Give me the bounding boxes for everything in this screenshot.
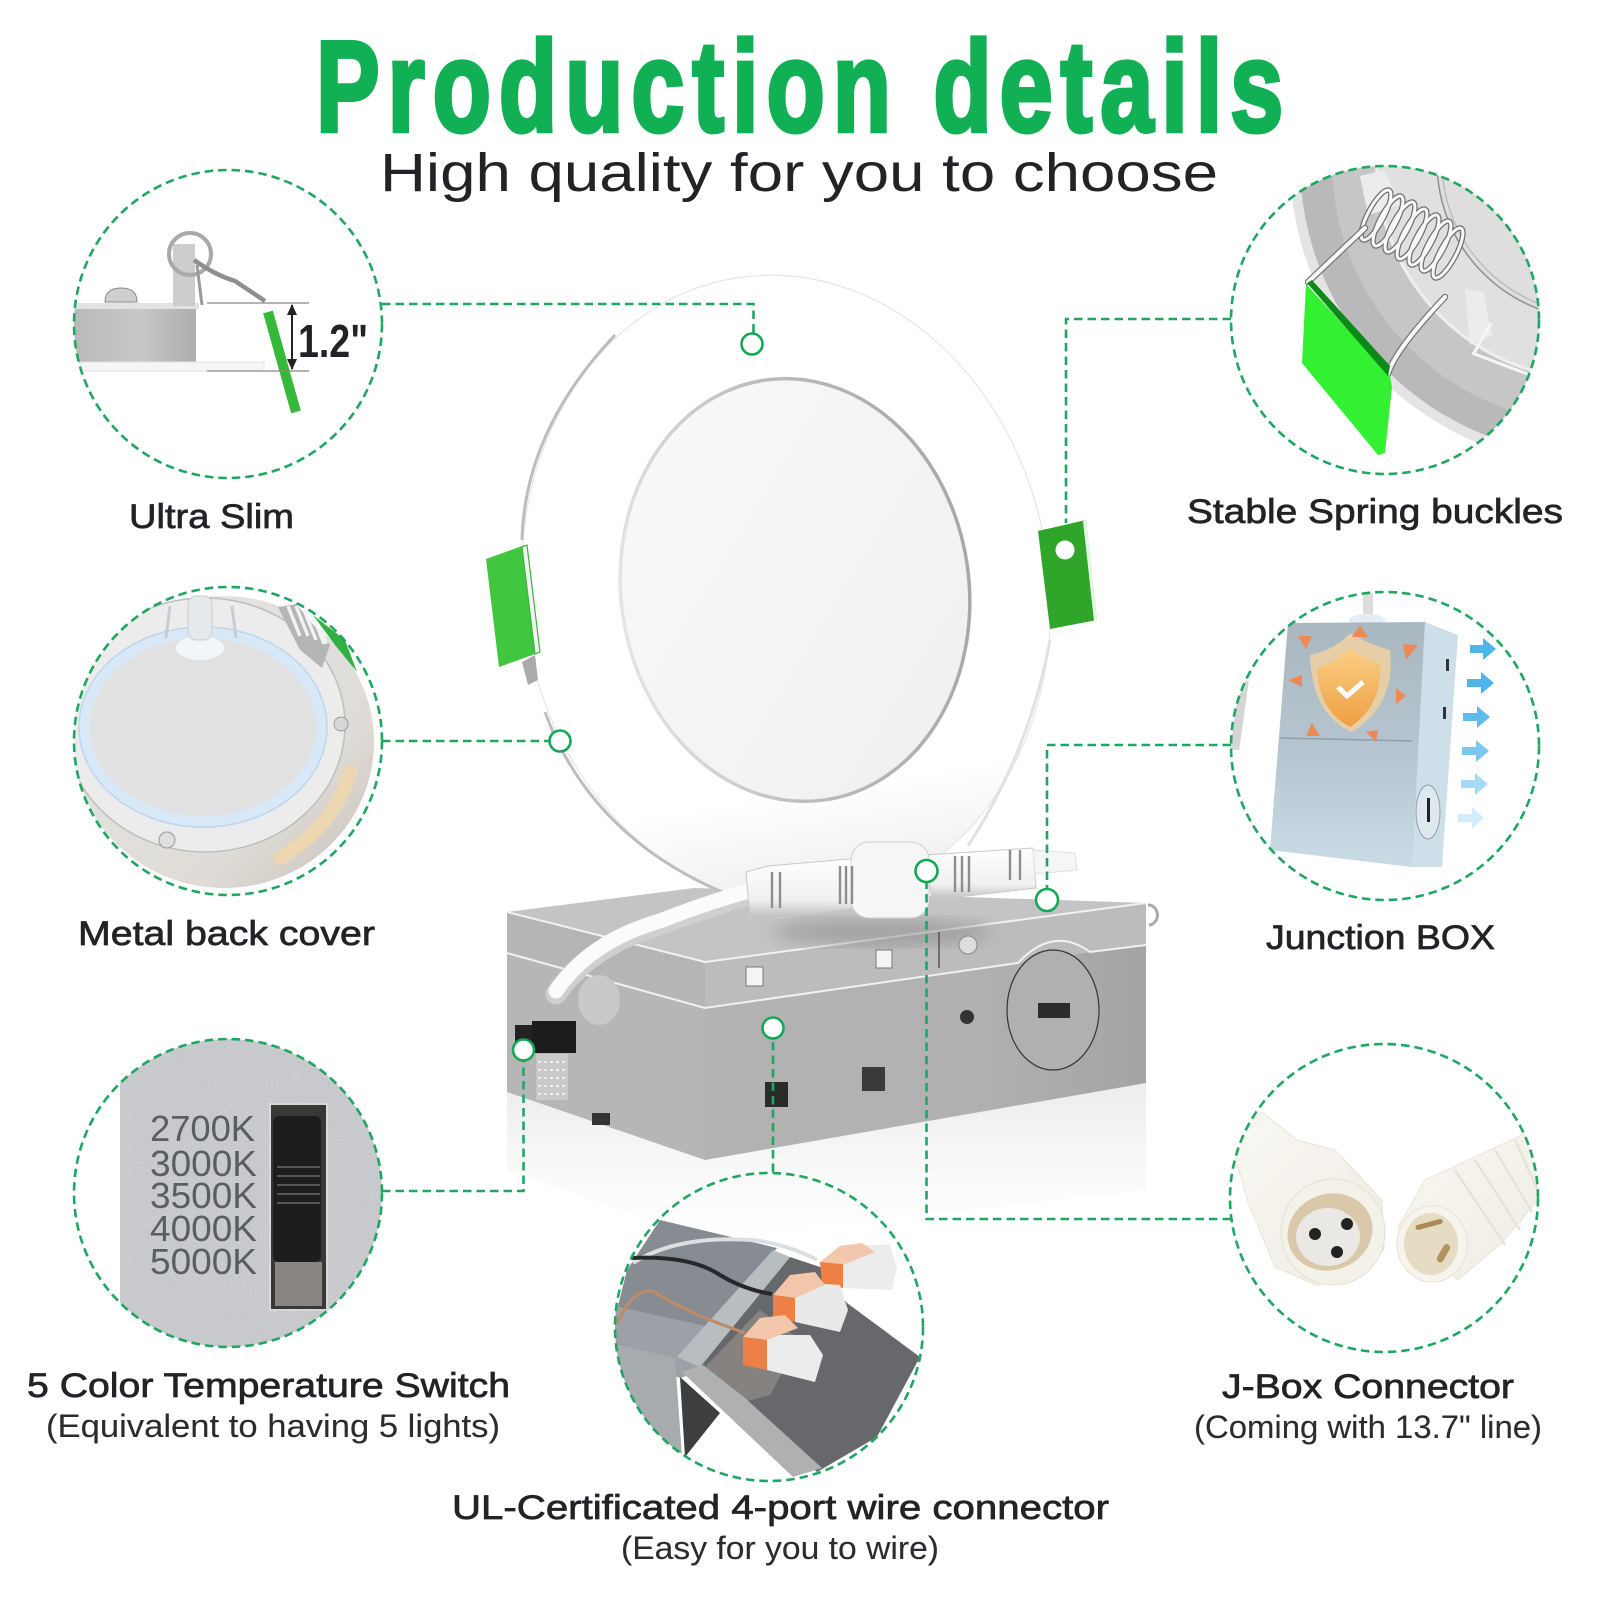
- lamp: [477, 237, 1097, 943]
- junction box product: [507, 888, 1157, 1240]
- connector: metal back cover: [382, 730, 570, 752]
- temperature labels: 2700K: [150, 1108, 255, 1149]
- label: ultra slim: Ultra Slim: [129, 498, 294, 536]
- connector: ultra slim: [382, 304, 762, 354]
- faceplate: [65, 598, 345, 852]
- ring body: [1292, 192, 1486, 442]
- panel: ultra slim: [70, 170, 382, 478]
- knockout: [1416, 785, 1440, 839]
- label: j-box connector: J-Box Connector: [1222, 1368, 1514, 1406]
- box front face: [705, 945, 1146, 1160]
- green clip: [268, 312, 296, 412]
- connector: junction box: [1036, 745, 1231, 911]
- panel: j-box connector: [1225, 1044, 1560, 1352]
- box interior: [617, 1220, 777, 1327]
- box lid left side: [507, 912, 705, 1008]
- dimension lines: [207, 303, 309, 371]
- label: metal back cover: Metal back cover: [78, 915, 375, 953]
- heat arrows: [1288, 625, 1418, 742]
- wire nut top: [820, 1243, 897, 1290]
- green tab: [1302, 284, 1392, 455]
- lens: [85, 633, 321, 821]
- panel: wire connector: [610, 1173, 923, 1481]
- panel: color temperature switch: 3500K: [150, 1175, 257, 1216]
- label: color temperature switch: 5 Color Temperature Switch: [27, 1367, 510, 1405]
- label: wire connector: UL-Certificated 4-port wire connector: [452, 1489, 1109, 1527]
- female connector: [1225, 1112, 1384, 1286]
- front wall: [617, 1345, 682, 1454]
- panel: color temperature switch: [74, 1030, 385, 1360]
- housing: [70, 309, 196, 363]
- cable and connector: [556, 842, 1077, 1025]
- connector: j-box connector: [916, 860, 1231, 1219]
- lamp ring: [477, 237, 1095, 943]
- connector: spring buckles: [1056, 319, 1231, 560]
- label: spring buckles: Stable Spring buckles: [1187, 493, 1563, 531]
- connector: wire connector: [762, 1018, 784, 1172]
- panel: spring buckles: [1230, 164, 1540, 476]
- lamp lens: [593, 356, 997, 824]
- label: junction box: Junction BOX: [1266, 919, 1495, 957]
- panel: metal back cover: [65, 587, 382, 895]
- dark metal plate: [700, 1257, 920, 1472]
- box lid top: [507, 888, 1146, 962]
- title: Production details: [316, 15, 1291, 159]
- wires: [633, 1239, 817, 1263]
- mount blocks: [1360, 170, 1400, 215]
- sublabel: j-box connector: (Coming with 13.7" line): [1194, 1409, 1542, 1445]
- left spring tab: [522, 655, 538, 685]
- back disc: [74, 596, 374, 888]
- wire nut middle: [773, 1272, 848, 1332]
- wire arms: [1308, 228, 1445, 374]
- box details: [1007, 950, 1099, 1070]
- box lid front side: [705, 903, 1146, 1008]
- cable stub: [1363, 592, 1373, 614]
- spring: [278, 604, 330, 668]
- heat shield: [1310, 633, 1391, 732]
- sublabel: wire connector: (Easy for you to wire): [621, 1530, 939, 1566]
- airflow arrows: [1458, 638, 1496, 829]
- spring coil: [1356, 187, 1468, 281]
- sublabel: color temperature switch: (Equivalent to having 5 lights): [46, 1408, 500, 1444]
- box left face: [507, 953, 705, 1160]
- box front: [1270, 622, 1425, 867]
- switch slot: [270, 1104, 327, 1310]
- box reflection: [507, 1083, 1146, 1240]
- green tab: [313, 615, 357, 672]
- panel: junction box: [1230, 592, 1539, 900]
- dimension value: 1.2": [298, 315, 368, 367]
- connector: color temperature switch: [382, 1040, 534, 1191]
- male connector: [1398, 1133, 1538, 1280]
- wire nut bottom: [743, 1315, 823, 1382]
- silver flange: [682, 1365, 822, 1477]
- subtitle: High quality for you to choose: [380, 143, 1218, 203]
- panel: color temperature switch: 3000K: [150, 1143, 257, 1184]
- panel: color temperature switch: 5000K: [150, 1241, 257, 1282]
- panel: color temperature switch: 4000K: [150, 1208, 257, 1249]
- box side: [1410, 622, 1458, 867]
- right spring tab: [1038, 520, 1097, 629]
